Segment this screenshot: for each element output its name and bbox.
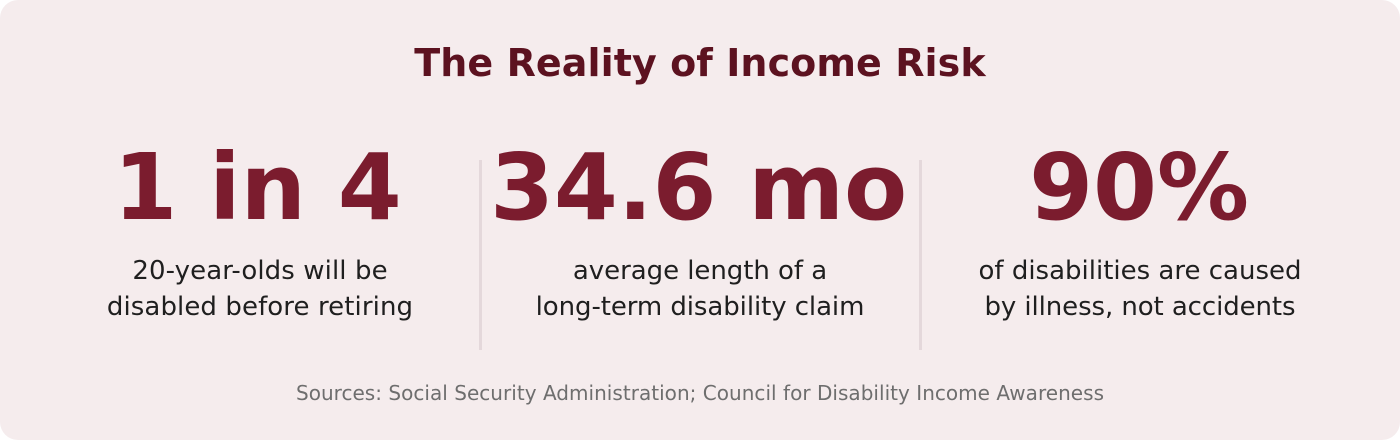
number: 1 in 4: 1 in 4 <box>113 134 402 241</box>
number: 34.6 mo: 34.6 mo <box>490 134 907 241</box>
sources note: Sources: Social Security Administration; Council for Disability Income Awareness <box>296 381 1104 405</box>
stat: 1 in 4 <box>107 134 413 322</box>
caption: 34.6 mo <box>536 256 864 322</box>
number: 90%: 90% <box>1029 134 1249 241</box>
stat: 34.6 mo <box>490 134 907 322</box>
stat: 90% <box>978 134 1302 322</box>
caption: 1 in 4: disabled before retiring <box>107 292 413 322</box>
caption: 90% <box>978 256 1302 322</box>
caption: 34.6 mo: long-term disability claim <box>536 292 864 322</box>
caption: 90%: by illness, not accidents <box>984 292 1295 322</box>
caption: 1 in 4: 20-year-olds will be <box>132 256 388 286</box>
caption: 34.6 mo: average length of a <box>573 256 827 286</box>
caption: 90%: of disabilities are caused <box>978 256 1302 286</box>
caption: 1 in 4 <box>107 256 413 322</box>
title: The Reality of Income Risk <box>414 41 986 85</box>
